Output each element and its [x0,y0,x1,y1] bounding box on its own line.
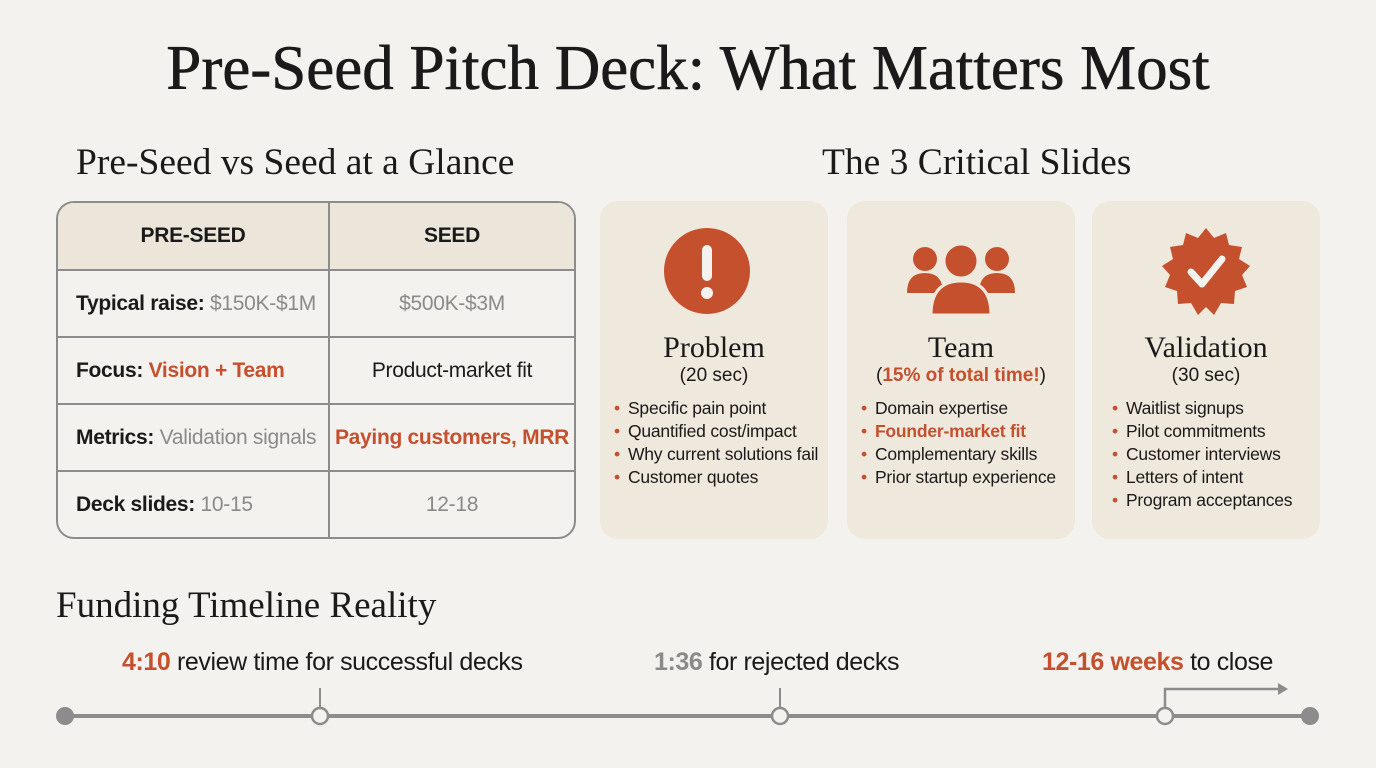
card: validation: Program acceptances [1126,490,1292,510]
comparison table: Metrics: Validation signals [76,426,316,448]
card: problem: (20 sec) [680,365,748,386]
comparison table: Deck slides: 10-15 [76,492,253,516]
card: team: (15% of total time!) [876,365,1046,386]
arrow [1165,683,1288,708]
card: team: Domain expertise [875,398,1008,418]
comparison table: Product-market fit [372,358,532,382]
card: problem [600,201,828,539]
comparison table: SEED [424,224,480,247]
heading: comparison: Pre-Seed vs Seed at a Glance [76,142,514,183]
timeline label: rejected: 1:36 for rejected decks [654,648,899,676]
card: validation [1092,201,1320,539]
title: Pre-Seed Pitch Deck: What Matters Most [166,33,1210,103]
timeline label: close: 12-16 weeks to close [1042,648,1273,676]
card: problem: Problem [663,331,765,364]
card: problem: Quantified cost/impact [628,421,797,441]
comparison table: $500K-$3M [399,292,505,314]
timeline label: successful: 4:10 review time for successful decks [122,648,523,676]
card: team: Founder-market fit [875,421,1026,441]
card: team: Prior startup experience [875,467,1056,487]
icon: team [907,246,1015,314]
card: team: Team [928,331,994,364]
comparison table [56,201,576,539]
comparison table: Focus: Vision + Team [76,358,285,382]
card: problem: Specific pain point [628,398,766,418]
card: problem: Why current solutions fail [628,444,818,464]
card: team: Complementary skills [875,444,1037,464]
heading: timeline: Funding Timeline Reality [56,585,436,626]
card: validation: Validation [1144,331,1268,364]
comparison table: Paying customers, MRR [335,426,569,448]
comparison table: 12-18 [426,492,478,516]
card: validation: Waitlist signups [1126,398,1244,418]
comparison table: PRE-SEED [141,224,245,247]
icon: exclamation [664,228,750,314]
card: problem: Customer quotes [628,467,758,487]
card: validation: Customer interviews [1126,444,1281,464]
comparison table: Typical raise: $150K-$1M [76,292,316,314]
card: team [847,201,1075,539]
timeline [56,683,1319,726]
icon: check badge [1162,228,1250,315]
heading: critical slides: The 3 Critical Slides [822,142,1131,183]
card: validation: Letters of intent [1126,467,1243,487]
card: validation: Pilot commitments [1126,421,1266,441]
card: validation: (30 sec) [1172,365,1240,386]
